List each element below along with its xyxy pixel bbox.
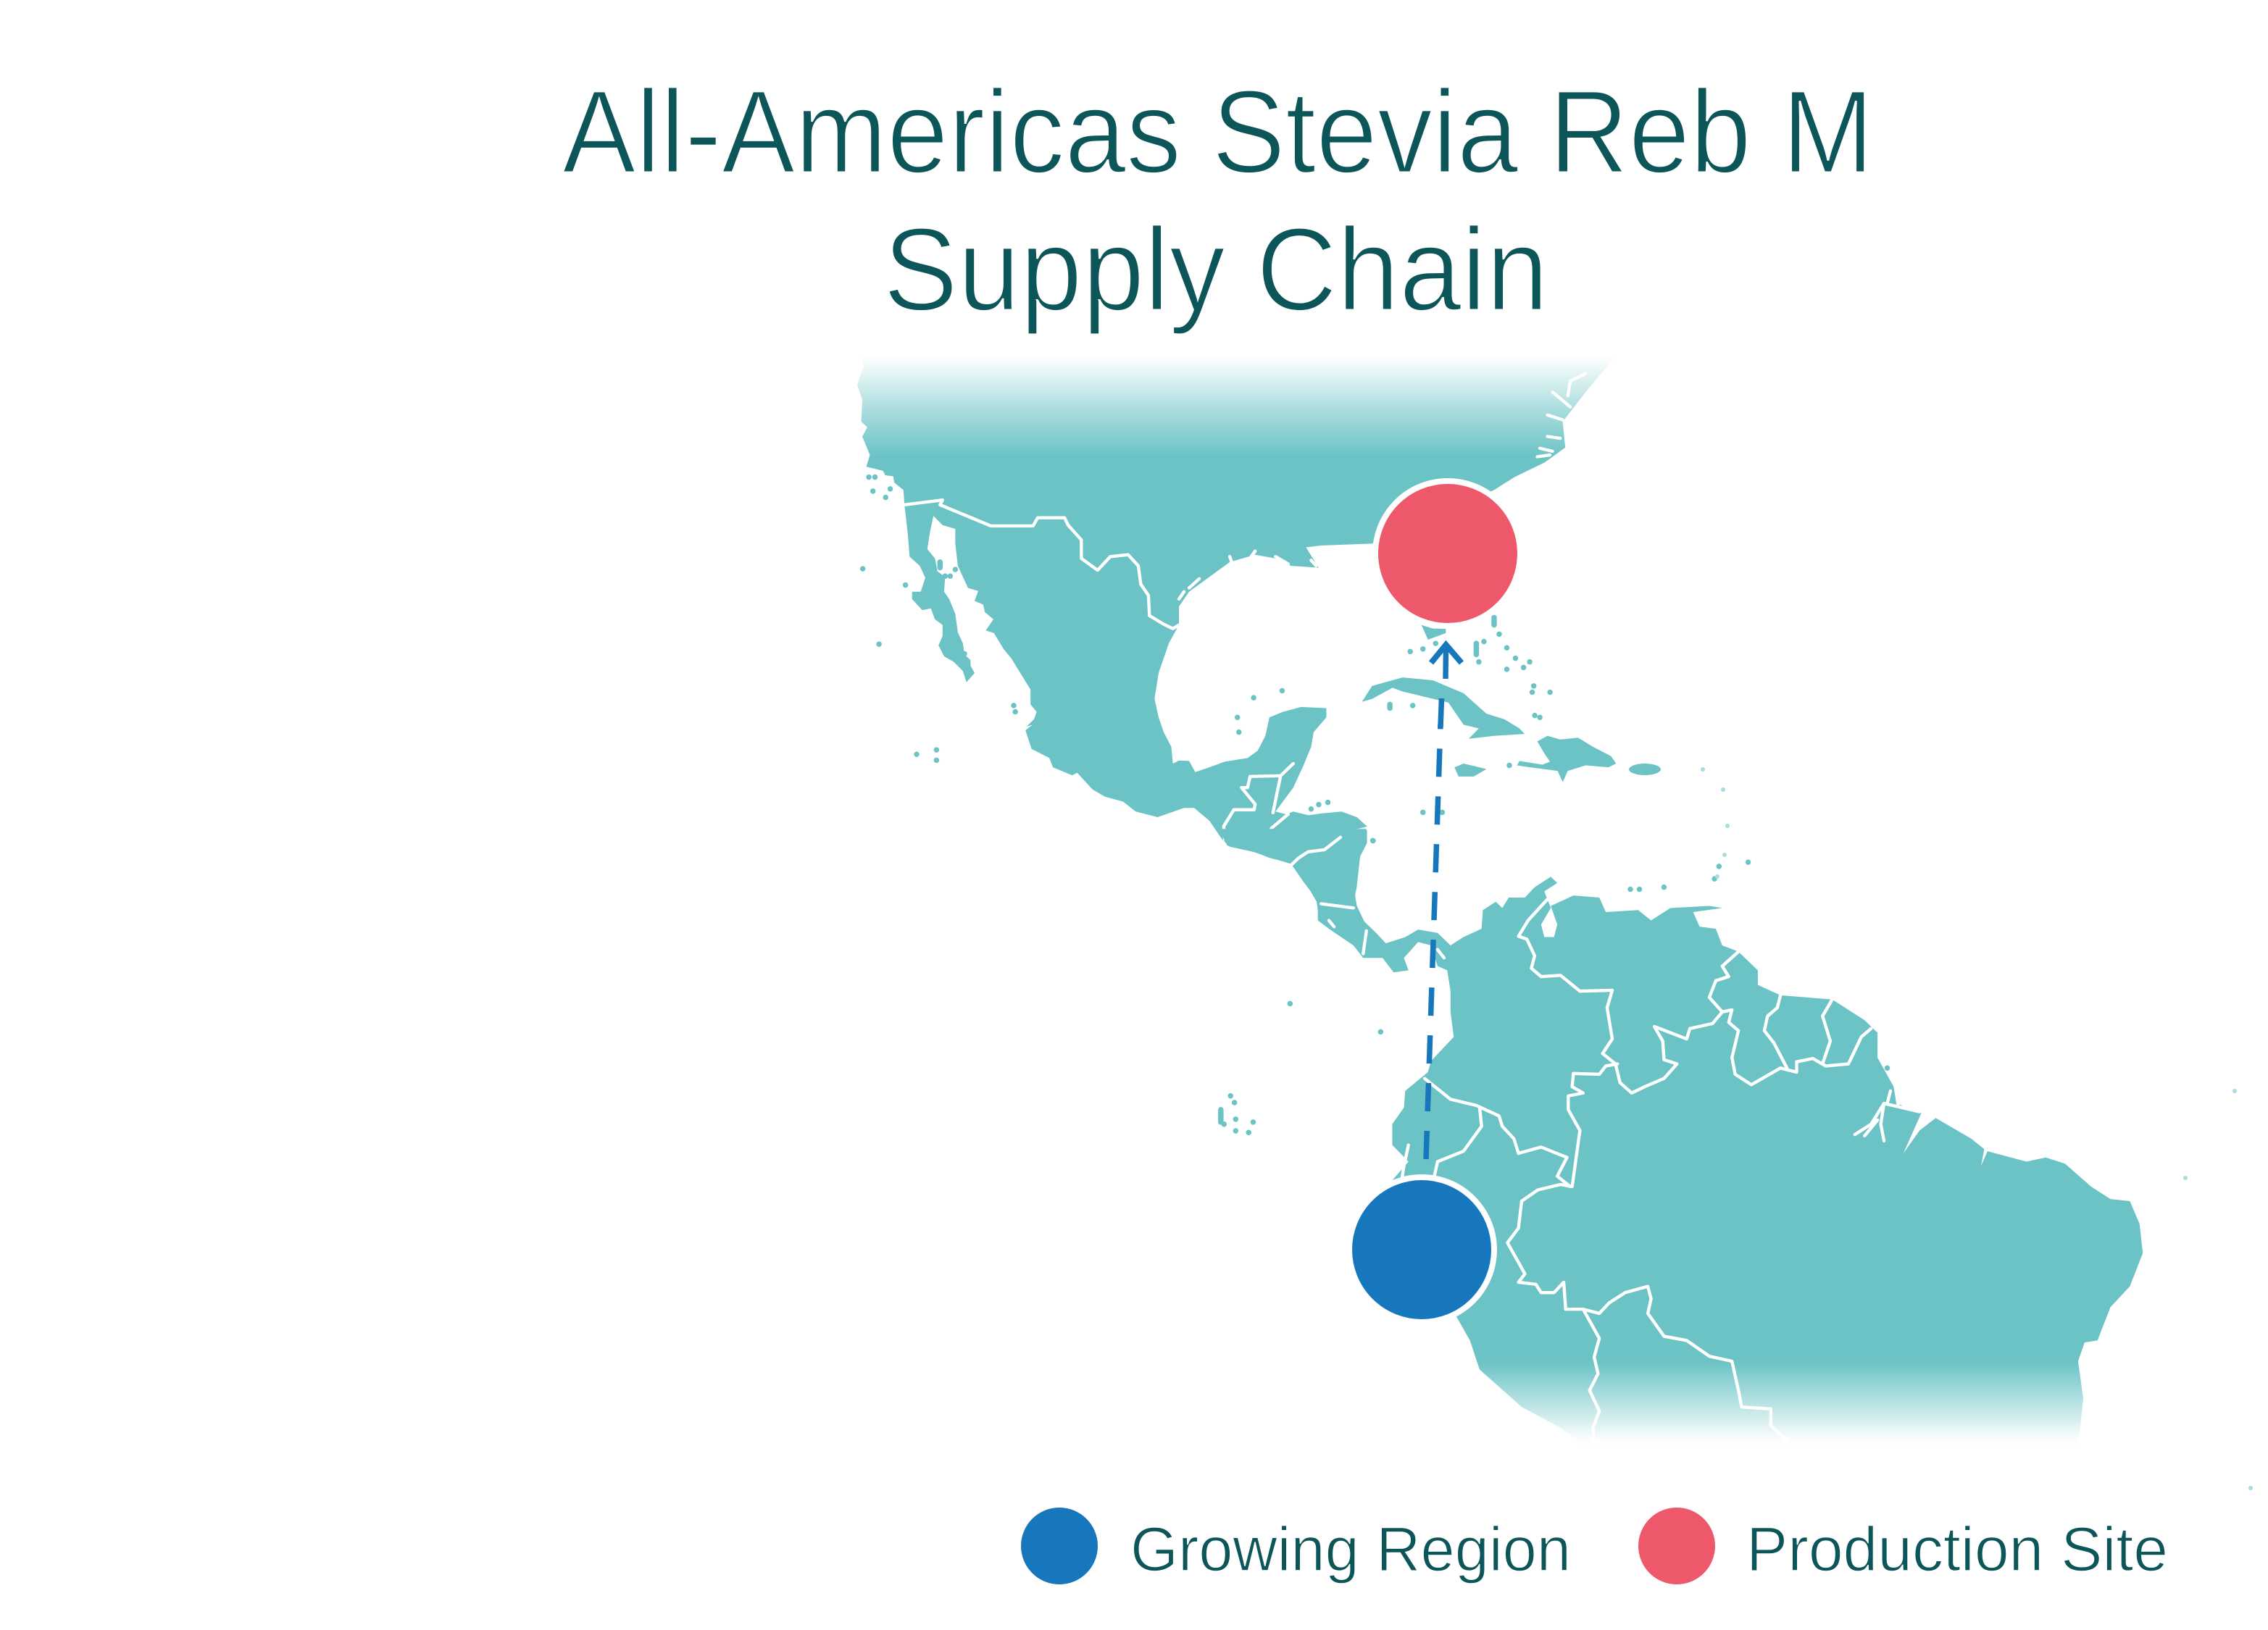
title: Supply Chain — [883, 203, 1548, 335]
marker: growing region — [1349, 1177, 1494, 1322]
bottom fade of the map — [1377, 1362, 2174, 1449]
legend: production site: Production Site — [1746, 1515, 2168, 1584]
title: All-Americas Stevia Reb M — [562, 65, 1874, 198]
legend: growing region: Growing Region — [1130, 1515, 1571, 1584]
map: Jamaica — [1454, 764, 1486, 777]
map of the Americas — [797, 346, 2251, 1488]
map: Cuba — [1362, 677, 1525, 739]
title — [562, 65, 1874, 335]
legend — [1021, 1508, 2168, 1584]
top fade of the map — [797, 346, 1667, 456]
marker: production site — [1375, 481, 1520, 626]
arrow: dashed route from growing region to production site — [1426, 645, 1462, 1159]
map: northern borders and coastal inlets — [904, 374, 1585, 867]
map: North and Central America — [857, 355, 1616, 927]
map: Pacific and Atlantic islets — [1221, 840, 1900, 1132]
map: Puerto Rico and Lesser Antilles — [1629, 764, 2251, 1488]
map: South America — [1219, 829, 2143, 1447]
map: South American borders — [1292, 837, 1919, 1445]
icon: Florida tip — [1422, 625, 1446, 640]
map: Hispaniola — [1517, 736, 1616, 782]
map: small islands — [863, 477, 1550, 841]
